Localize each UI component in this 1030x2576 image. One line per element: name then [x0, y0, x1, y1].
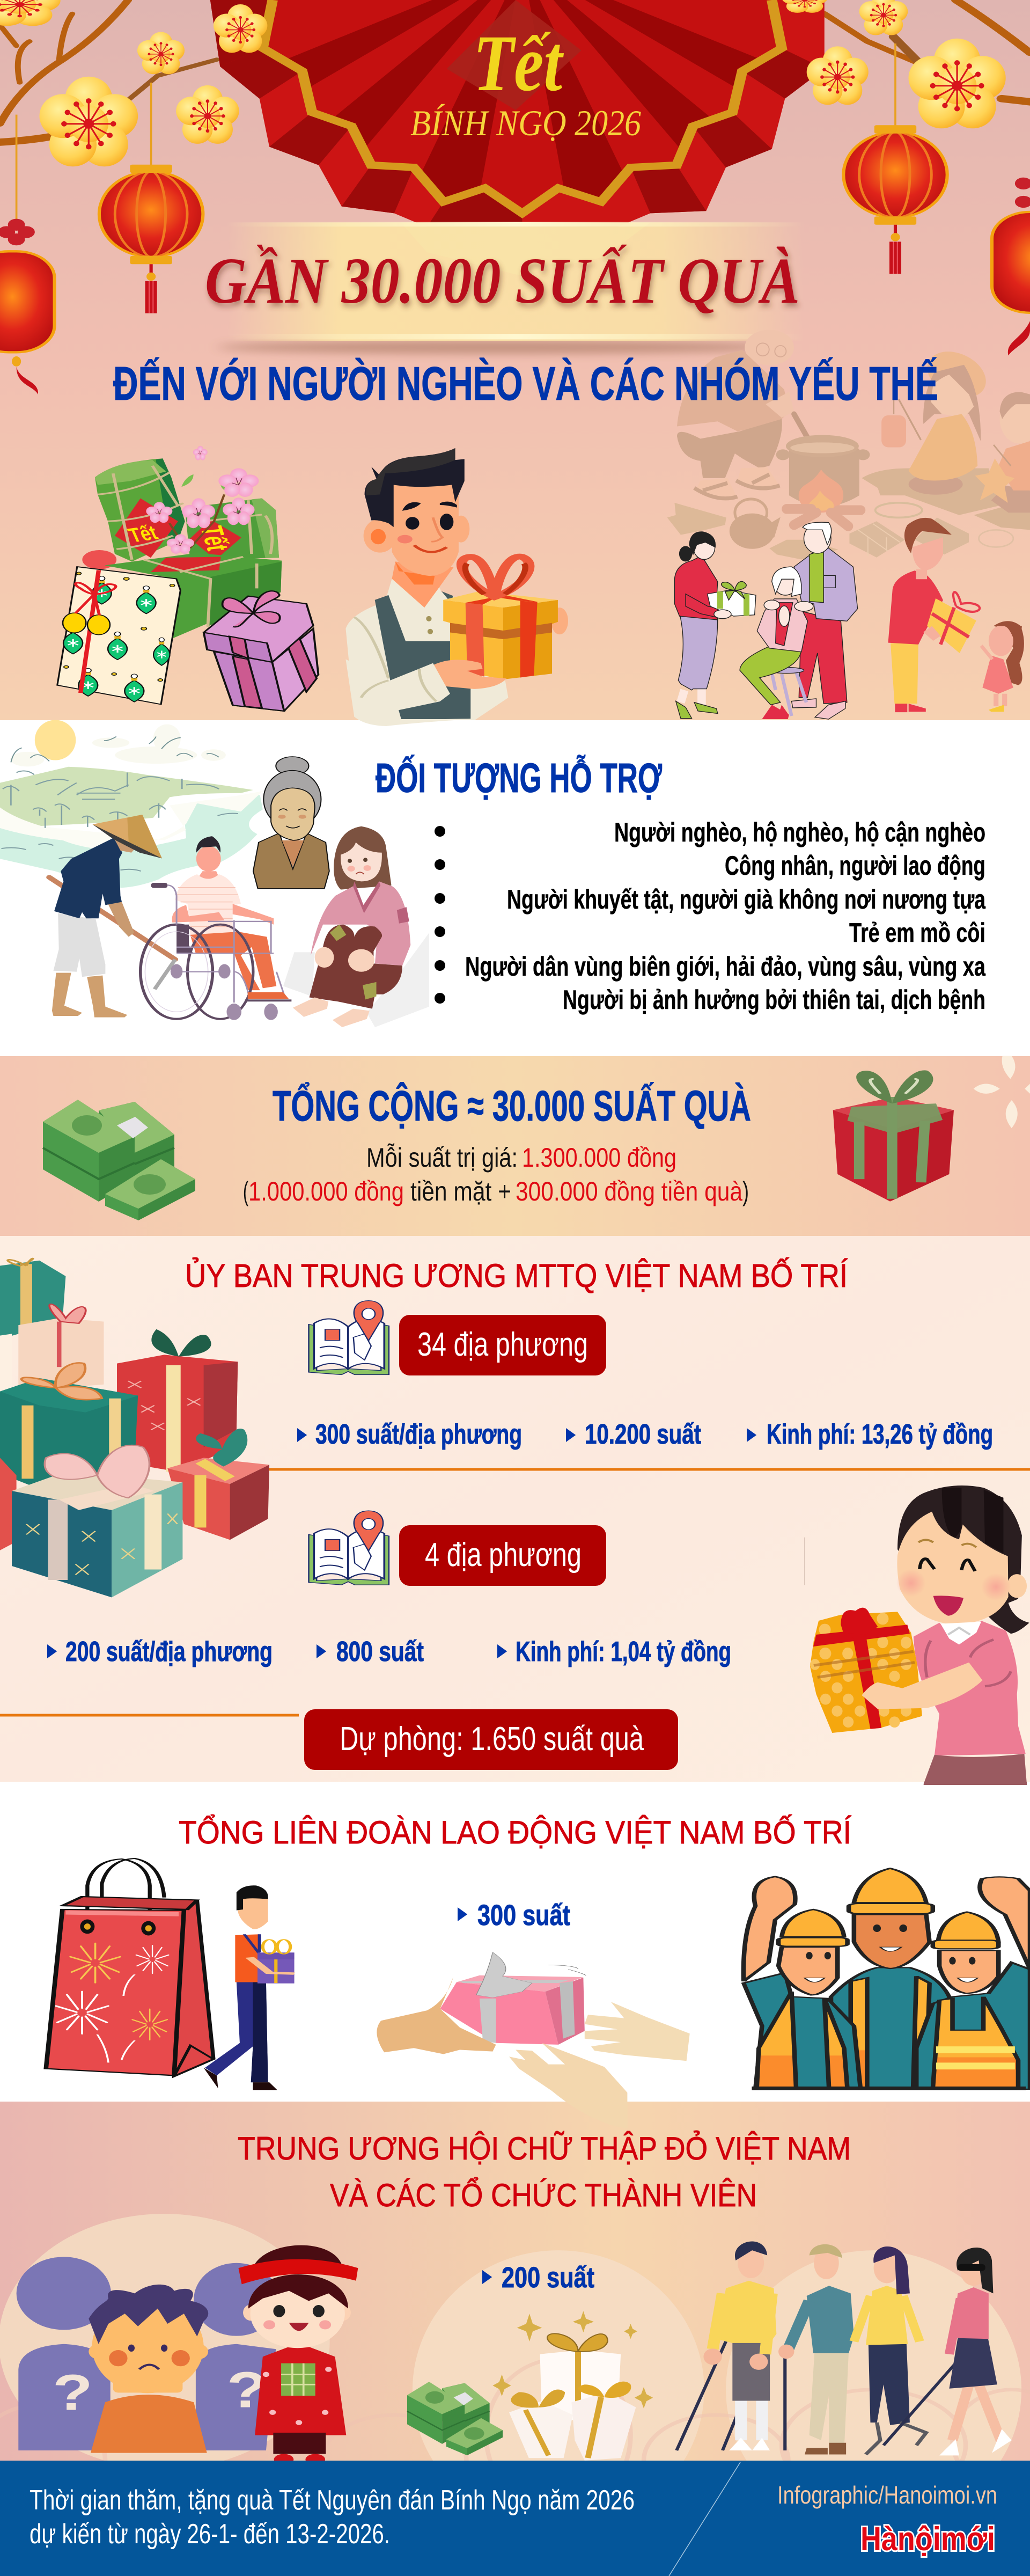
- list of target groups: Trẻ em mồ côi: [849, 918, 985, 948]
- lanterns: [0, 43, 1030, 394]
- footer note: dự kiến từ ngày 26-1- đến 13-2-2026.: [30, 2519, 390, 2550]
- old woman: [253, 757, 329, 889]
- man's shirt overlapping into white panel: [358, 719, 472, 726]
- red paper fan: [210, 0, 825, 222]
- text: value per gift: 300.000 đồng tiền quà: [516, 1176, 742, 1206]
- text: value per gift: Mỗi suất trị giá:: [366, 1143, 518, 1173]
- gifts and disabled people: [492, 2242, 1012, 2461]
- section heading: MTTQ: ỦY BAN TRUNG ƯƠNG MTTQ VIỆT NAM BỐ TRÍ: [185, 1257, 848, 1294]
- label: 300 gifts: [458, 1899, 570, 1931]
- stack of gifts: [0, 1258, 269, 1598]
- pill: reserve: [304, 1709, 678, 1770]
- child in red ao dai: [238, 2245, 358, 2465]
- family scene artwork: [667, 330, 1030, 719]
- blossom flowers: [0, 0, 1006, 166]
- text: value per gift: tiền mặt +: [410, 1176, 511, 1206]
- blind woman with cane: [884, 2248, 1012, 2455]
- man holding gift: [345, 448, 568, 727]
- man in wheelchair: [141, 836, 291, 1020]
- text: value per gift: (: [243, 1176, 248, 1206]
- background scallop pattern: [0, 2214, 1030, 2529]
- text: value per gift: 1.000.000 đồng: [248, 1176, 404, 1206]
- panel: red cross background: [0, 2102, 1030, 2461]
- panel: labor federation background: [0, 1782, 1030, 2102]
- row: 4 localities figures: 800 suất: [336, 1636, 424, 1667]
- white and gold gifts: [492, 2311, 653, 2461]
- woman's skirt edge at panel boundary: [924, 1782, 1027, 1785]
- illustrations: red cross section: [0, 2214, 1030, 2529]
- list of target groups: [435, 817, 986, 1015]
- row: 4 localities figures: [47, 1636, 731, 1667]
- gold banner: [217, 222, 805, 354]
- heading: target groups: ĐỐI TƯỢNG HỖ TRỢ: [376, 755, 662, 801]
- pill: 34 localities: [399, 1315, 606, 1375]
- icon: red gift with green ribbon: [833, 1056, 1030, 1202]
- gift pile artwork and man: [57, 446, 568, 727]
- label: 300 gifts: 300 suất: [477, 1899, 570, 1931]
- text: value per gift: ): [742, 1176, 749, 1206]
- worried child with silhouettes: ?: [226, 2362, 267, 2418]
- banh chung pile with peach blossoms: [82, 446, 282, 638]
- divider lines: [0, 1469, 1030, 1715]
- elderly couple: [740, 522, 858, 719]
- sad girl on newspapers: [283, 826, 429, 1027]
- farmer with hoe: [49, 815, 175, 1018]
- woman giving gift: [674, 532, 756, 719]
- text: value per gift: 1.300.000 đồng: [522, 1143, 676, 1173]
- person with crutches: [676, 2242, 776, 2450]
- branches: [0, 0, 1030, 142]
- worried child with silhouettes: [17, 2257, 279, 2453]
- footer bar: [0, 2461, 1030, 2576]
- construction workers: [744, 1868, 1030, 2089]
- heading: total gifts: TỔNG CỘNG ≈ 30.000 SUẤT QUÀ: [273, 1082, 751, 1130]
- label: 200 gifts: [482, 2262, 594, 2294]
- boy giving gift to girl: [888, 518, 1024, 712]
- pill: 4 localities: [399, 1525, 606, 1586]
- main headline: GẦN 30.000 SUẤT QUÀ: [205, 244, 800, 317]
- section heading: labor federation: TỔNG LIÊN ĐOÀN LAO ĐỘNG VIỆT NAM BỐ TRÍ: [179, 1814, 851, 1850]
- elderly man with cane: [778, 2244, 854, 2454]
- section heading: red cross: VÀ CÁC TỔ CHỨC THÀNH VIÊN: [330, 2177, 757, 2213]
- title: Tết: Tết: [473, 19, 564, 108]
- landscape: [0, 720, 263, 888]
- gift passed between hands: [377, 1952, 690, 2128]
- row: 34 localities figures: [297, 1419, 993, 1450]
- banh chung pile with peach blossoms: Tết: [124, 521, 161, 547]
- row: 4 localities figures: 200 suất/địa phương: [65, 1636, 273, 1667]
- header decorations: [0, 0, 1030, 394]
- panel: total gifts background: [0, 1056, 1030, 1237]
- icon: map book 2: [309, 1511, 389, 1585]
- delivery man: [204, 1885, 295, 2090]
- icon: money stacks: [43, 1100, 195, 1220]
- text: value per gift: [243, 1143, 749, 1206]
- purple gift box: [204, 591, 318, 711]
- footer note: Thời gian thăm, tặng quà Tết Nguyên đán Bính Ngọ năm 2026: [30, 2485, 635, 2516]
- illustration: smiling woman with gift: [805, 1485, 1029, 1784]
- label: 200 gifts: 200 suất: [502, 2262, 594, 2294]
- pill: reserve: Dự phòng: 1.650 suất quà: [340, 1721, 644, 1758]
- row: 34 localities figures: 10.200 suất: [585, 1419, 701, 1450]
- pill: 4 localities: 4 địa phương: [425, 1536, 582, 1574]
- row: 34 localities figures: 300 suất/địa phương: [315, 1419, 522, 1450]
- pill: 34 localities: 34 địa phương: [417, 1326, 588, 1363]
- section heading: red cross: [238, 2131, 851, 2213]
- section heading: red cross: TRUNG ƯƠNG HỘI CHỮ THẬP ĐỎ VIỆT NAM: [238, 2131, 851, 2167]
- illustration: people in need: [0, 720, 429, 1027]
- icon: map book 1: [309, 1301, 389, 1375]
- panel: target groups background: [0, 720, 1030, 1056]
- worried child with silhouettes: ?: [53, 2365, 93, 2421]
- illustration: gifts and icons: [0, 1258, 389, 1598]
- title: Bính Ngọ 2026: BÍNH NGỌ 2026: [410, 103, 641, 143]
- footer note: [30, 2485, 635, 2550]
- banh chung pile with peach blossoms: Tết: [194, 524, 236, 552]
- newspaper logo: Hànộimới: [860, 2521, 995, 2558]
- woman with prosthetic leg: [854, 2246, 926, 2454]
- panel: MTTQ allocation background: [0, 1236, 1030, 1782]
- row: 4 localities figures: Kinh phí: 1,04 tỷ đồng: [516, 1636, 731, 1667]
- shopping bag with fireworks: [46, 1858, 214, 2076]
- illustrations: labor section: [46, 1858, 1030, 2128]
- cream gift card with ornaments: [57, 567, 180, 704]
- icon: small money stack: [407, 2382, 503, 2455]
- faint cooking scene in background: [667, 330, 1030, 559]
- header panel background: [0, 0, 1030, 722]
